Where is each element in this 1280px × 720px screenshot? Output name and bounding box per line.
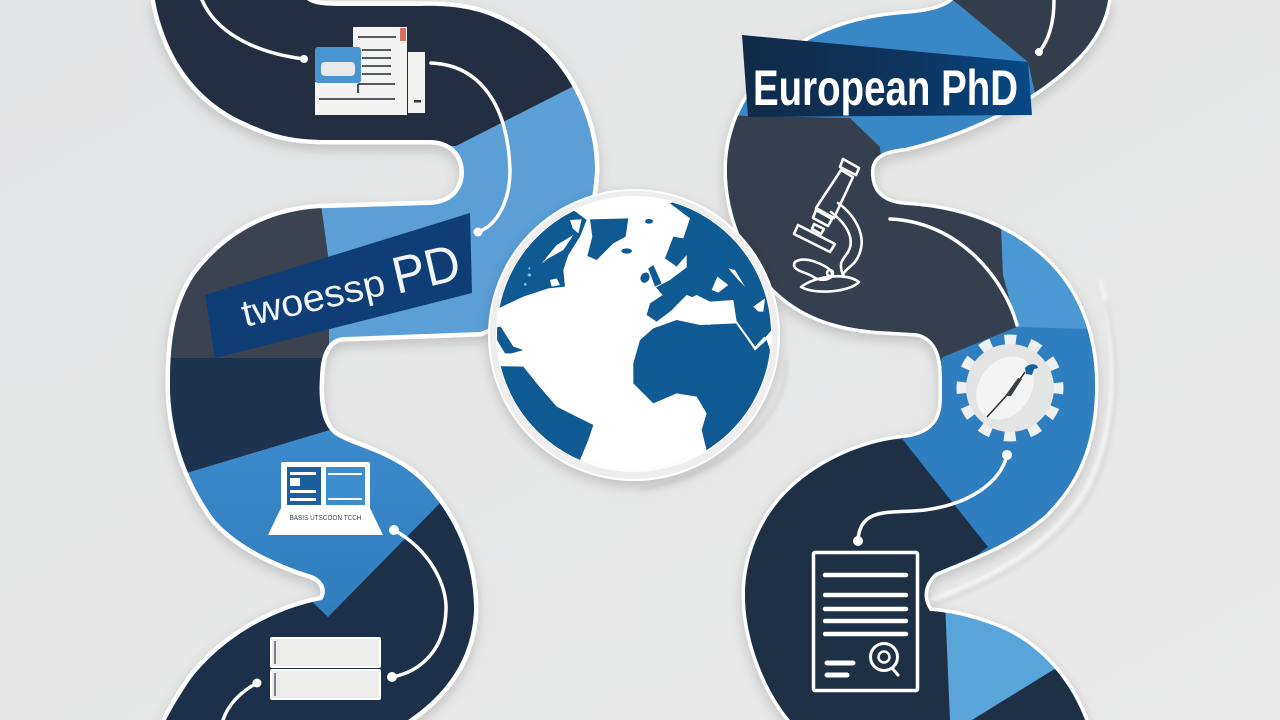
globe disc <box>496 196 772 472</box>
banner text: European PhD <box>753 60 1018 116</box>
laptop caption: BASIS UTSCOON TCCH <box>290 513 362 522</box>
ribbon colour segments <box>700 0 1120 720</box>
decorative glass halo <box>640 280 1115 606</box>
globe rim <box>489 190 779 480</box>
icon: laptop <box>268 462 383 535</box>
connector dots, right <box>853 48 1043 546</box>
ribbon outline <box>155 0 595 720</box>
connector lines, right <box>858 0 1054 540</box>
icon: documents and book <box>315 27 425 115</box>
panel: left ribbon <box>140 0 620 720</box>
globe land masses <box>490 193 780 462</box>
icon: gear with pen <box>962 340 1058 436</box>
banner: right label <box>742 35 1032 117</box>
globe white detail <box>524 219 765 325</box>
banner text: PD: PD <box>387 234 466 306</box>
banner text: first word: twoessp <box>238 262 389 336</box>
panel: right ribbon <box>700 0 1120 720</box>
banner: left label <box>205 213 472 358</box>
ribbon colour segments <box>140 0 620 720</box>
connector dots, left <box>252 55 482 688</box>
icon: microscope <box>794 159 862 292</box>
icon: stacked books <box>271 638 380 699</box>
ribbon outline <box>727 0 1108 720</box>
connector lines, left <box>202 0 510 720</box>
red sea line <box>736 322 765 348</box>
globe <box>489 190 780 480</box>
icon: certificate document <box>814 552 918 690</box>
